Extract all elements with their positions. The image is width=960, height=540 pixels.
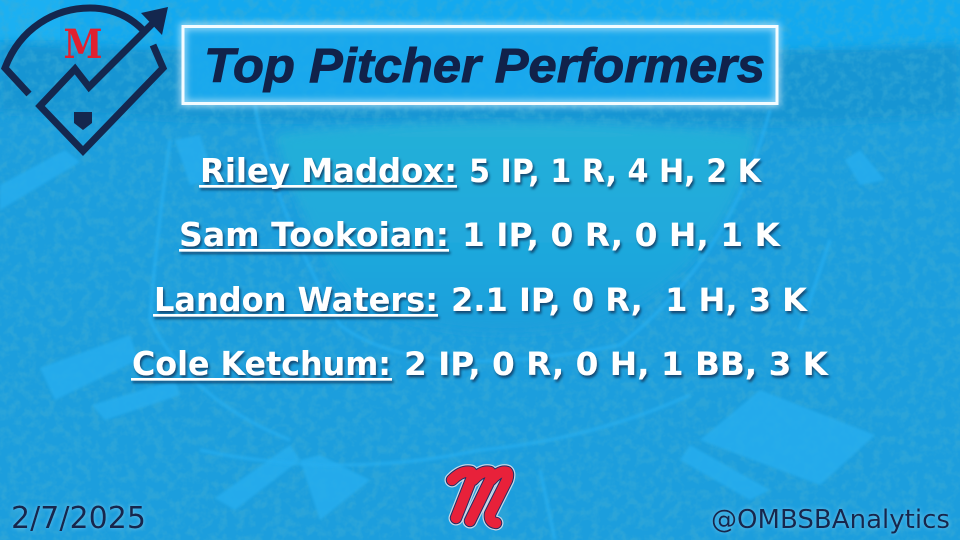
stat line: Landon Waters: Landon Waters:	[154, 280, 438, 319]
logo: diamond with rising arrow	[5, 7, 168, 151]
date: 2/7/2025	[11, 501, 146, 536]
stat line: Sam Tookoian: 1 IP, 0 R, 0 H, 1 K	[462, 216, 781, 254]
logo block M: M	[64, 21, 102, 68]
handle: @OMBSBAnalytics	[711, 505, 950, 535]
title: Top Pitcher Performers	[204, 40, 765, 93]
stat line: Landon Waters	[153, 280, 808, 319]
icon: script M logo	[452, 472, 508, 523]
logo arc	[5, 8, 143, 94]
stat line: Sam Tookoian: Sam Tookoian:	[179, 215, 449, 254]
stat line: Cole Ketchum	[131, 344, 829, 383]
stat line: Riley Maddox	[199, 151, 762, 190]
logo home plate	[74, 112, 92, 130]
stat line: Sam Tookoian	[179, 215, 781, 254]
stat line: Cole Ketchum: Cole Ketchum:	[132, 344, 391, 383]
stat line: Cole Ketchum: 2 IP, 0 R, 0 H, 1 BB, 3 K	[404, 345, 829, 383]
logo arrow head	[141, 7, 168, 35]
title box	[183, 26, 777, 104]
stat lines	[131, 151, 829, 383]
stat line: Riley Maddox: Riley Maddox:	[200, 151, 457, 190]
stat line: Riley Maddox: 5 IP, 1 R, 4 H, 2 K	[469, 152, 762, 190]
stat line: Landon Waters: 2.1 IP, 0 R, 1 H, 3 K	[451, 281, 808, 319]
logo diamond and arrow line	[40, 24, 163, 151]
